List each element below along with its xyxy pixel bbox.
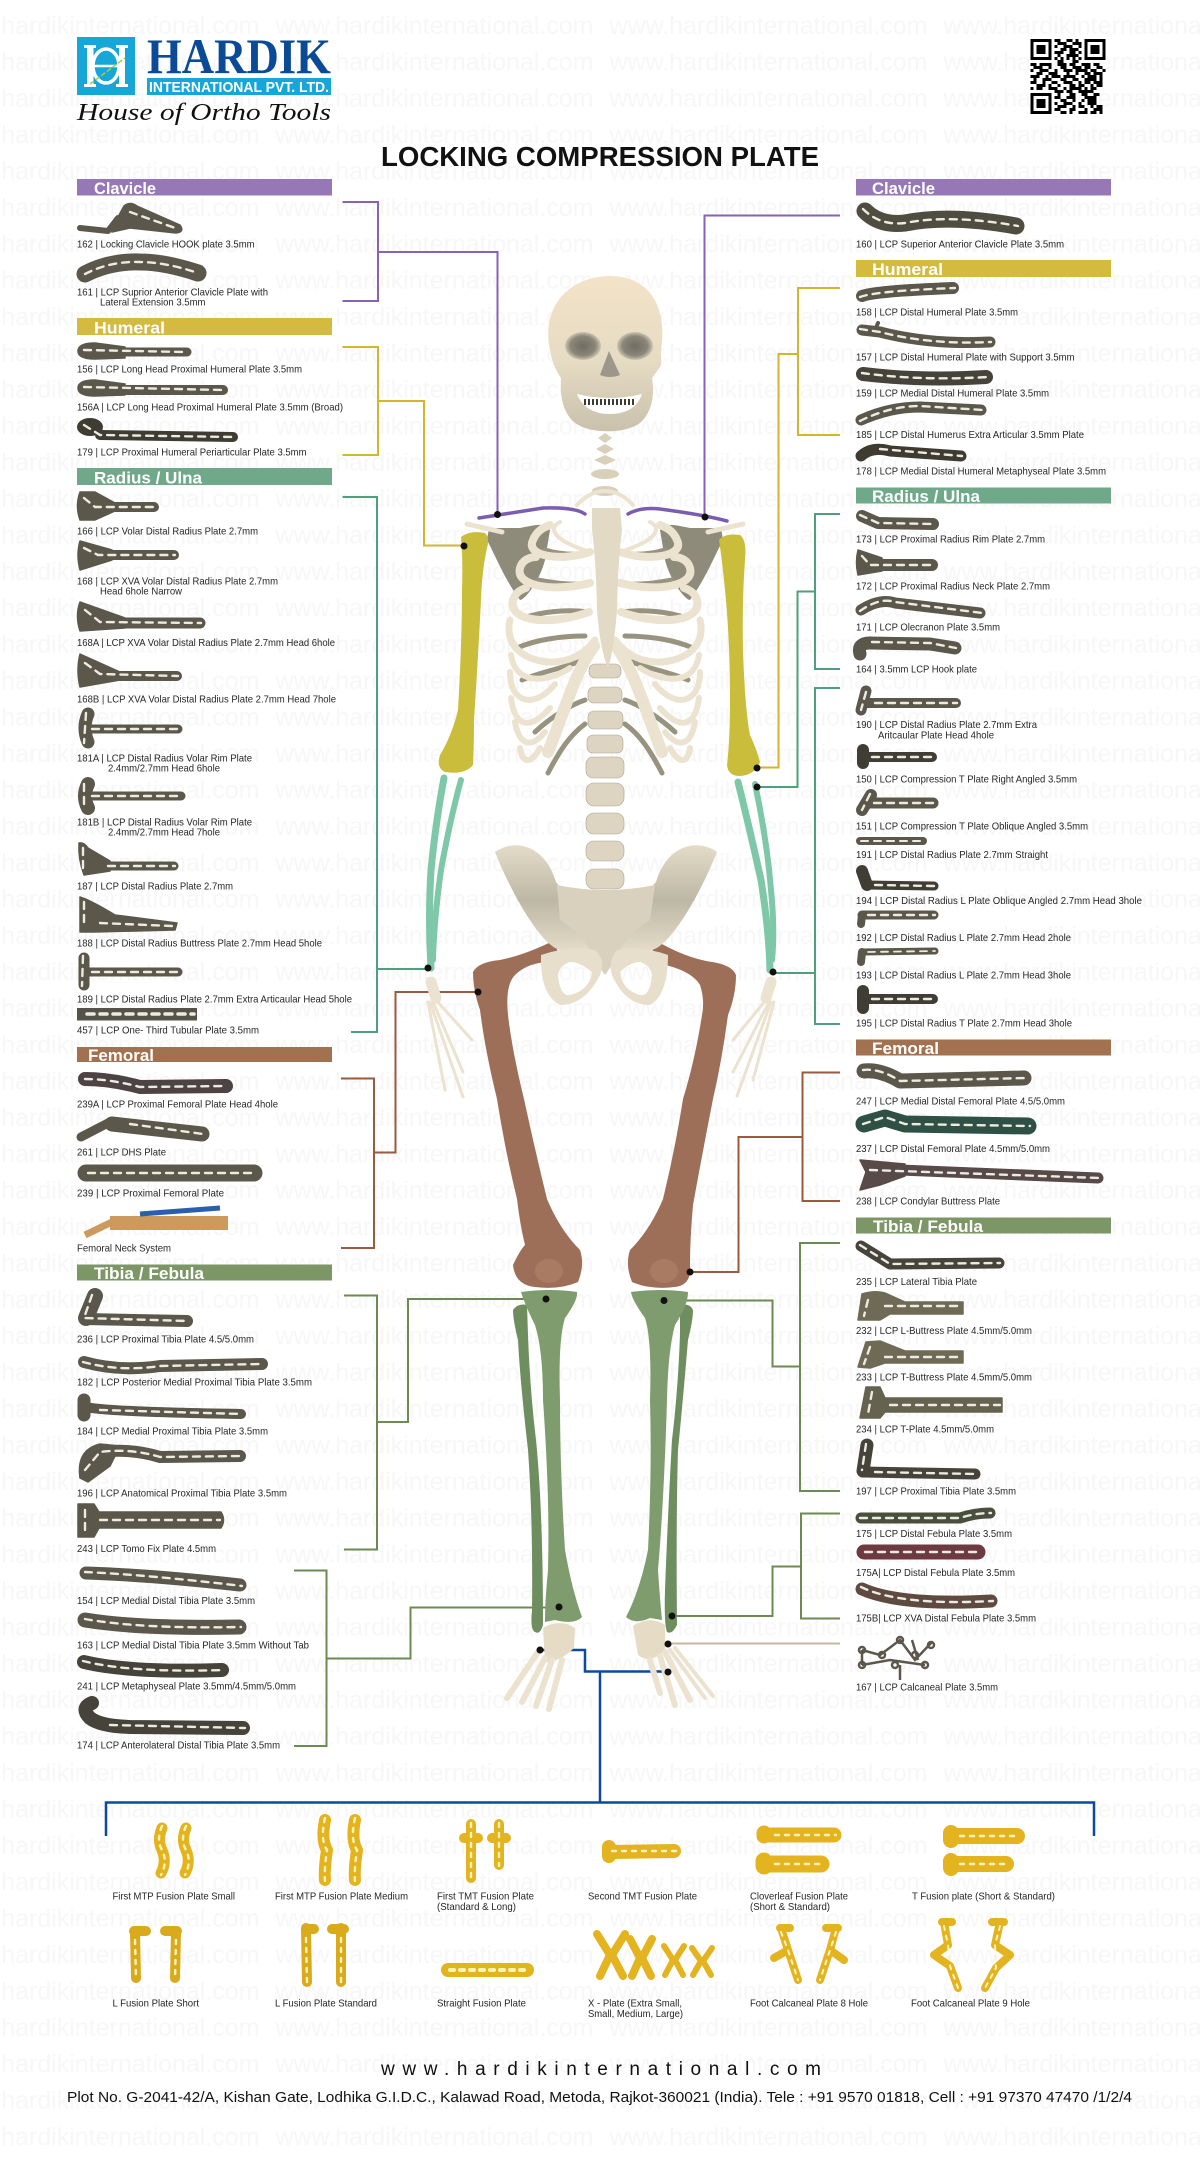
plate icon: 162 hook [80,204,182,233]
label: 179: 179 | LCP Proximal Humeral Periarticular Plate 3.5mm [77,448,306,458]
plate icon: 150 [862,750,934,763]
icon: QR code [1030,39,1106,114]
label: 171: 171 | LCP Olecranon Plate 3.5mm [856,622,1000,634]
hand left [428,982,472,1097]
plate icon: 193 [861,951,935,962]
plate icon: 151 [862,794,934,810]
heading: Tibia / Febula: Tibia / Febula [94,1265,205,1283]
plate icon: 168B [78,654,178,687]
foot left [507,1623,575,1709]
label: 163: 163 | LCP Medial Distal Tibia Plate 3.5mm Without Tab [77,1640,309,1652]
plate icon: 163 [85,1619,241,1627]
radius and ulna right [738,782,773,970]
panel: right tibia fibula [856,1218,1111,1694]
foot right [633,1620,713,1705]
heading: Clavicle [77,179,332,198]
label: 188: 188 | LCP Distal Radius Buttress Plate 2.7mm Head 5hole [77,938,322,950]
label: 167: 167 | LCP Calcaneal Plate 3.5mm [856,1682,998,1694]
label: First TMT: First TMT Fusion Plate [437,1892,534,1902]
label: 159: 159 | LCP Medial Distal Humeral Plate 3.5mm [856,388,1049,400]
plate icon: 171 [860,601,982,613]
label: 175: 175 | LCP Distal Febula Plate 3.5mm [856,1529,1012,1540]
label: 234: 234 | LCP T-Plate 4.5mm/5.0mm [856,1424,994,1436]
heading: Radius / Ulna [856,488,1111,506]
femur right [628,940,736,1288]
label: 161: 161 | LCP Suprior Anterior Clavicle Plate with [77,288,268,298]
connector: left tibia proximal bracket [344,1296,546,1550]
plate icon: 168 [78,541,175,570]
panel: left clavicle [77,179,332,308]
plate icon: 178 [861,449,962,456]
icon: logo monogram [77,37,135,95]
label: 190: Aritcaular Plate Head 4hole [878,730,994,742]
plate icon: L fusion short [134,1931,177,1978]
label: 168A: 168A | LCP XVA Volar Distal Radius Plate 2.7mm Head 6hole [77,638,335,649]
plate icon: 192 [861,915,935,924]
connector: left clavicle bracket [342,202,498,514]
heading: Radius / Ulna: Radius / Ulna [94,470,203,488]
footer website: www.hardikinternational.com [380,2059,821,2080]
heading: Femoral [77,1047,332,1065]
plate icon: 179 [77,418,233,437]
plate icon: Foot calcaneal 9 hole [934,1922,1010,1988]
footer address: Plot No. G-2041-42/A, Kishan Gate, Lodhika G.I.D.C., Kalawad Road, Metoda, Rajkot-360021 (India). Tele : +91 9570 01818, Cell : +91 97370 47470 /1/2/4 [67,2090,1132,2106]
label: 193: 193 | LCP Distal Radius L Plate 2.7mm Head 3hole [856,970,1071,982]
label: 181A: 181A | LCP Distal Radius Volar Rim Plate [77,754,252,764]
femur left [473,940,582,1288]
plate icon: 234 [860,1387,1002,1418]
connector: left femoral bracket [341,992,478,1248]
plate icon: First TMT [464,1823,506,1880]
heading: Humeral: Humeral [872,261,943,279]
connector: foot fusion trunk [106,1650,1094,1836]
label: 168: Head 6hole Narrow [100,586,183,598]
patella left [535,1259,563,1283]
label: First MTP small: First MTP Fusion Plate Small [112,1892,235,1902]
label: 236: 236 | LCP Proximal Tibia Plate 4.5/5.0mm [77,1334,254,1346]
label: First MTP medium: First MTP Fusion Plate Medium [275,1892,408,1902]
plate icon: 166 [78,492,155,520]
label: 150: 150 | LCP Compression T Plate Right Angled 3.5mm [856,774,1077,786]
plate icon: 181B [84,784,182,808]
label: 243: 243 | LCP Tomo Fix Plate 4.5mm [77,1544,216,1555]
plate icon: 175A [864,1544,979,1560]
label: 195: 195 | LCP Distal Radius T Plate 2.7mm Head 3hole [856,1018,1072,1030]
plate icon: 191 [860,837,923,845]
logo: Hardik International [76,28,331,126]
label: 457: 457 | LCP One- Third Tubular Plate 3.5mm [77,1026,259,1036]
label: 194: 194 | LCP Distal Radius L Plate Oblique Angled 2.7mm Head 3hole [856,896,1142,907]
label: 182: 182 | LCP Posterior Medial Proximal Tibia Plate 3.5mm [77,1378,312,1388]
label: 189: 189 | LCP Distal Radius Plate 2.7mm Extra Articaular Head 5hole [77,994,352,1006]
connector: right radius proximal bracket [757,514,840,787]
label: 164: 164 | 3.5mm LCP Hook plate [856,664,977,676]
plate icon: 237 [863,1117,1030,1126]
panel: left humeral [77,318,343,458]
label: 166: 166 | LCP Volar Distal Radius Plate 2.7mm [77,526,258,538]
logo subtitle bar: INTERNATIONAL PVT. LTD. [149,79,329,96]
plate icon: 232 [858,1292,963,1320]
title: LOCKING COMPRESSION PLATE [381,141,819,172]
plate icon: 182 [83,1362,263,1368]
label: 235: 235 | LCP Lateral Tibia Plate [856,1277,977,1288]
panel: left tibia fibula [77,1264,332,1752]
label: 161: Lateral Extension 3.5mm [100,298,206,308]
panel: right humeral [856,260,1111,478]
label: 238: 238 | LCP Condylar Buttress Plate [856,1196,1000,1208]
plate icon: 158 [860,288,955,297]
panel: left femoral [77,1047,332,1254]
plate icon: 174 [85,1703,245,1728]
plate icon: 196 [79,1444,241,1482]
plate icon: 187 [79,843,175,875]
label: 156A: 156A | LCP Long Head Proximal Humeral Plate 3.5mm (Broad) [77,402,343,414]
panel: right clavicle [856,179,1111,250]
plate icon: First MTP small [159,1826,189,1875]
plate icon: 261 [81,1122,203,1137]
label: L fusion standard: L Fusion Plate Standard [275,1998,377,2010]
label: 233: 233 | LCP T-Buttress Plate 4.5mm/5.0mm [856,1372,1032,1384]
heading: Clavicle: Clavicle [872,180,935,198]
plate icon: 173 [860,515,935,524]
rib cage right [605,491,701,773]
heading: Tibia / Febula: Tibia / Febula [873,1218,984,1236]
label: X plates: X - Plate (Extra Small, [588,1998,682,2010]
label: 156: 156 | LCP Long Head Proximal Humeral Plate 3.5mm [77,364,302,376]
fibula left [513,1305,543,1633]
plate icon: 241 [83,1661,224,1671]
label: 157: 157 | LCP Distal Humeral Plate with Support 3.5mm [856,352,1074,364]
label: X plates: Small, Medium, Large) [588,2009,683,2020]
label: 168B: 168B | LCP XVA Volar Distal Radius Plate 2.7mm Head 7hole [77,694,336,706]
label: 197: 197 | LCP Proximal Tibia Plate 3.5mm [856,1486,1016,1498]
heading: Tibia / Febula [77,1264,332,1283]
connector: right humeral bracket [757,288,840,768]
plate icon: T fusion [951,1833,1019,1868]
plate icon: 154 [85,1572,242,1586]
connector: right clavicle [704,216,840,517]
label: 247: 247 | LCP Medial Distal Femoral Plate 4.5/5.0mm [856,1096,1065,1108]
heading: Humeral [77,318,332,338]
label: 196: 196 | LCP Anatomical Proximal Tibia Plate 3.5mm [77,1488,287,1500]
scapula left [487,525,550,600]
label: Foot calcaneal 8 hole: Foot Calcaneal Plate 8 Hole [750,1998,868,2010]
skull [548,276,662,431]
panel: right femoral [856,1040,1111,1208]
label: 168: 168 | LCP XVA Volar Distal Radius Plate 2.7mm [77,576,278,588]
plate icon: 175B [861,1587,993,1602]
rib cage left [509,491,605,773]
plate icon: 235 [860,1245,1000,1264]
logo wordmark: HARDIK [147,28,331,84]
neck vertebrae [591,433,619,496]
heading: Humeral: Humeral [94,320,165,338]
humerus right [719,535,760,776]
plate icon: 156 [78,343,187,359]
plate icon: L fusion standard [306,1928,344,1982]
plate icon: 160 [863,209,1018,226]
plate icon: 156A [78,380,223,396]
bone marker dots [424,511,776,1676]
plate icon: 164 [859,642,956,654]
plate icon: 233 [858,1341,963,1368]
label: T fusion: T Fusion plate (Short & Standard) [912,1892,1055,1902]
connector: calcaneal line [668,1642,840,1644]
plate icon: 172 [856,550,933,575]
clavicle left [479,508,585,518]
label: 162: 162 | Locking Clavicle HOOK plate 3.5mm [77,240,254,250]
label: 232: 232 | LCP L-Buttress Plate 4.5mm/5.0mm [856,1326,1032,1337]
label: 181A: 2.4mm/2.7mm Head 6hole [108,764,220,774]
label: Femoral Neck System: Femoral Neck System [77,1244,171,1254]
tibia right [626,1290,688,1621]
connector: left humeral bracket [342,347,464,546]
skeleton illustration [424,276,776,1709]
connector: left tibia distal bracket [294,1570,559,1746]
scapula right [660,525,723,600]
label: 184: 184 | LCP Medial Proximal Tibia Plate 3.5mm [77,1426,268,1438]
pelvis [495,845,717,1005]
heading: Femoral [856,1040,1111,1058]
heading: Tibia / Febula [856,1218,1111,1236]
plate icon: Femoral Neck System [85,1208,228,1235]
acromion right [708,524,743,532]
label: 261: 261 | LCP DHS Plate [77,1148,166,1158]
plate icon: 457 [77,1008,197,1020]
spine [586,664,624,889]
label: 178: 178 | LCP Medial Distal Humeral Metaphyseal Plate 3.5mm [856,466,1106,478]
heading: Femoral: Femoral [88,1047,154,1065]
label: 239: 239 | LCP Proximal Femoral Plate [77,1188,224,1200]
plate icon: 168A [78,602,201,631]
plate icon: 185 [860,406,983,421]
heading: Radius / Ulna [77,468,332,488]
label: 190: 190 | LCP Distal Radius Plate 2.7mm Extra [856,720,1037,731]
plate icon: 243 [78,1504,224,1537]
plate icon: 236 [84,1295,188,1321]
label: Cloverleaf: Cloverleaf Fusion Plate [750,1892,848,1902]
label: 241: 241 | LCP Metaphyseal Plate 3.5mm/4.5mm/5.0mm [77,1682,296,1692]
label: 175B: 175B| LCP XVA Distal Febula Plate 3.5mm [856,1614,1036,1624]
label: 151: 151 | LCP Compression T Plate Oblique Angled 3.5mm [856,822,1088,832]
plate icon: 188 [80,897,177,932]
plate icon: 190 [861,691,957,710]
connector: right fibula distal bracket [672,1514,840,1618]
patella right [650,1259,678,1283]
label: 191: 191 | LCP Distal Radius Plate 2.7mm Straight [856,850,1048,861]
panel: left radius ulna [77,468,352,1036]
plate icon: 161 [85,262,198,274]
tibia left [521,1290,582,1622]
label: 174: 174 | LCP Anterolateral Distal Tibia Plate 3.5mm [77,1740,280,1752]
heading: Radius / Ulna: Radius / Ulna [872,488,981,506]
clavicle right [628,509,727,521]
acromion left [467,524,502,532]
plate icon: 239 [86,1164,255,1182]
plate icon: Second TMT [609,1847,676,1856]
label: 181B: 2.4mm/2.7mm Head 7hole [108,828,220,838]
plate icon: 197 [862,1444,975,1474]
heading: Humeral [856,260,1111,279]
label: 237: 237 | LCP Distal Femoral Plate 4.5mm/5.0mm [856,1144,1050,1155]
label: Second TMT: Second TMT Fusion Plate [588,1892,697,1902]
plate icon: 238 [860,1160,1099,1190]
panel: right radius ulna [856,488,1142,1030]
plate icon: 181A [84,713,178,743]
connector: left radius ulna bracket [342,497,428,1032]
plate icon: 157 [860,323,991,343]
label: 172: 172 | LCP Proximal Radius Neck Plate 2.7mm [856,582,1050,592]
plate icon: 159 [862,373,988,378]
connector: right femoral bracket [690,1072,840,1272]
label: 187: 187 | LCP Distal Radius Plate 2.7mm [77,882,233,892]
label: 160: 160 | LCP Superior Anterior Clavicle Plate 3.5mm [856,240,1064,250]
label: 173: 173 | LCP Proximal Radius Rim Plate 2.7mm [856,534,1045,546]
label: 185: 185 | LCP Distal Humerus Extra Articular 3.5mm Plate [856,430,1084,441]
label: 175A: 175A| LCP Distal Febula Plate 3.5mm [856,1568,1015,1579]
plate icon: 175 [860,1513,991,1518]
label: Foot calcaneal 9 hole: Foot Calcaneal Plate 9 Hole [911,1998,1030,2010]
plate icon: 194 [862,871,934,886]
label: 192: 192 | LCP Distal Radius L Plate 2.7mm Head 2hole [856,933,1071,944]
plate icon: X plates [597,1934,712,1976]
plate icon: 247 [863,1070,1026,1081]
plate icon: 189 [82,956,178,986]
sternum [592,508,622,668]
plate icon: First MTP medium [323,1818,357,1882]
heading: Clavicle: Clavicle [94,180,156,198]
connector: right radius distal bracket [773,688,840,1024]
logo tagline: House of Ortho Tools [76,100,331,126]
plate icon: 239A [85,1079,226,1087]
label: straight fusion: Straight Fusion Plate [437,1998,526,2010]
hand right [733,982,774,1096]
plate icon: Cloverleaf [764,1833,836,1866]
radius and ulna left [430,778,461,968]
label: Cloverleaf: (Short & Standard) [750,1902,830,1913]
plate icon: 167 calcaneal [859,1637,934,1680]
label: 154: 154 | LCP Medial Distal Tibia Plate 3.5mm [77,1596,255,1607]
label: 181B: 181B | LCP Distal Radius Volar Rim Plate [77,818,252,828]
plate icon: 184 [84,1400,242,1415]
plate icon: Foot calcaneal 8 hole [774,1928,844,1980]
humerus left [439,532,488,773]
connector: right tibia proximal bracket [664,1243,840,1491]
label: 239A: 239A | LCP Proximal Femoral Plate Head 4hole [77,1100,278,1110]
heading: Femoral: Femoral [872,1040,939,1058]
fibula right [665,1305,693,1633]
heading: Clavicle [856,179,1111,198]
label: 158: 158 | LCP Distal Humeral Plate 3.5mm [856,308,1018,318]
plate icon: straight fusion [448,1963,527,1977]
label: First TMT: (Standard & Long) [437,1902,516,1913]
plate icon: 195 [863,991,934,1008]
label: L fusion short: L Fusion Plate Short [112,1998,199,2010]
panel: foot fusion plates [112,1818,1055,2020]
